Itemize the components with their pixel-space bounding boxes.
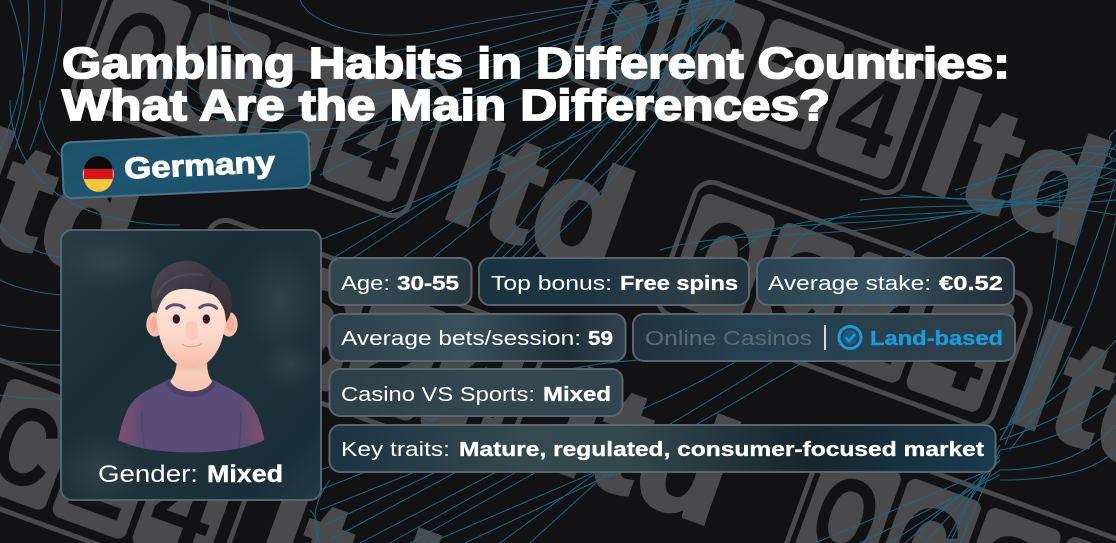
mouth (182, 344, 202, 347)
chip: key traits: Key traits: (341, 438, 450, 461)
chip: online casinos vs land-based (633, 314, 1015, 361)
nose (186, 322, 198, 340)
chip: top bonus: Free spins (620, 272, 738, 295)
chip: average bets per session (330, 314, 626, 361)
chip: average bets per session: Average bets/session: (341, 327, 581, 350)
panel: avatar (55, 230, 321, 510)
chip: age: Age: (341, 272, 390, 295)
shirt (118, 379, 264, 452)
chip: average stake: Average stake: (768, 272, 931, 295)
icon: check mark (839, 326, 861, 348)
gender label (98, 461, 283, 488)
icon: German flag (83, 156, 114, 192)
chip: average bets per session: 59 (588, 327, 613, 350)
chip: age: 30-55 (397, 272, 459, 295)
chip: average stake: €0.52 (939, 272, 1003, 295)
gender label: Gender: (98, 461, 198, 488)
chip: casino vs sports: Mixed (543, 383, 611, 406)
background logo pattern: 2 (344, 289, 443, 427)
chip: online casinos vs land-based: Online Casinos (645, 327, 812, 350)
background logo pattern: 4 (326, 70, 425, 208)
background logo pattern: 2 (246, 41, 345, 179)
face (157, 287, 225, 368)
background logo pattern: 2 (56, 407, 155, 543)
background logo pattern: 2 (740, 18, 839, 156)
chip: top bonus: Top bonus: (491, 272, 612, 295)
gender label: Mixed (207, 461, 283, 488)
chip: age (330, 258, 472, 305)
background logo pattern: 4 (910, 280, 1009, 418)
icon: avatar of a man (118, 261, 264, 452)
background logo pattern: 4 (820, 47, 919, 185)
background logo pattern: 4 (424, 318, 523, 456)
eyes (173, 314, 180, 324)
background logo pattern: C (264, 260, 363, 398)
hair (151, 261, 232, 322)
background logo pattern: C (166, 12, 265, 150)
ears (146, 312, 164, 337)
country name: Germany (123, 146, 276, 186)
chip: average stake (757, 258, 1014, 305)
chip: online casinos vs land-based: Land-based (870, 327, 1003, 350)
title (62, 39, 1010, 130)
country badge: Germany (61, 131, 311, 199)
background logo pattern: O (670, 193, 770, 331)
chip: top bonus (479, 258, 749, 305)
chip: key traits: Mature, regulated, consumer-focused market (459, 438, 984, 461)
background logo pattern: 2 (830, 251, 929, 389)
brows (167, 305, 184, 308)
chip: key traits (330, 425, 996, 472)
chip: casino vs sports (330, 369, 622, 416)
background logo pattern: ltd (428, 90, 651, 304)
background logo pattern: C (750, 222, 849, 360)
background logo pattern: O (184, 231, 284, 369)
title: Gambling Habits in Different Countries: (62, 39, 1010, 88)
title: What Are the Main Differences? (62, 81, 830, 130)
neck (170, 357, 212, 392)
chip: casino vs sports: Casino VS Sports: (341, 383, 535, 406)
